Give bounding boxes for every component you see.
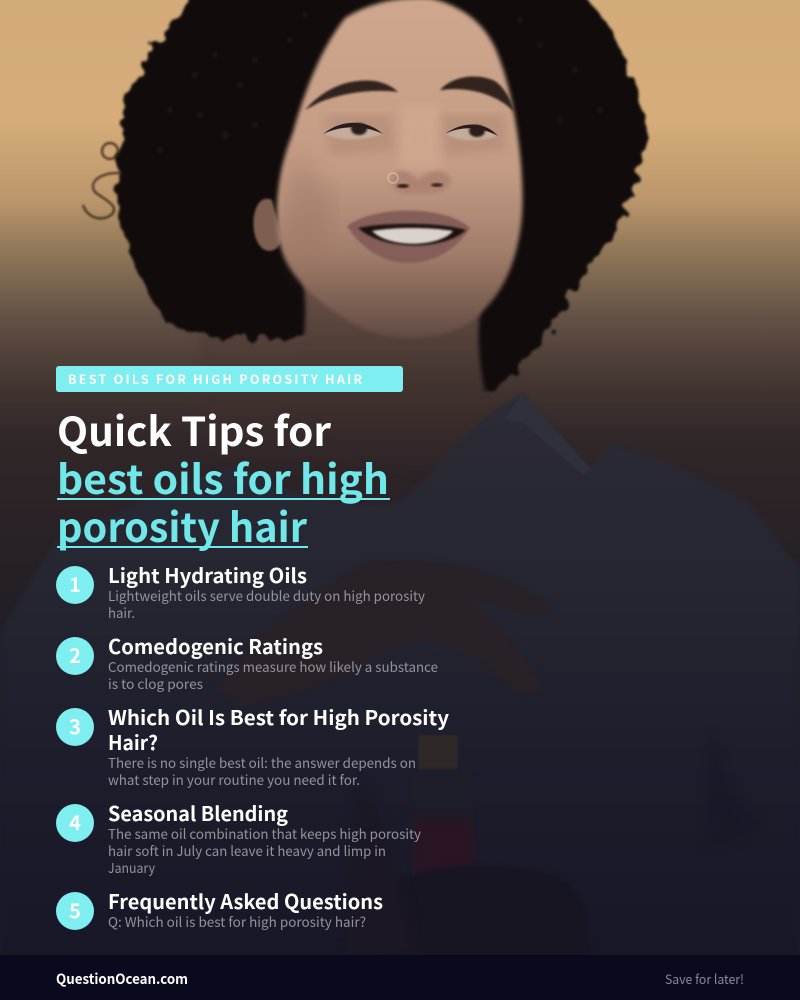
tip 3: what step in your routine you need it for. bbox=[108, 769, 360, 789]
neck bbox=[280, 280, 490, 480]
tip 1: Lightweight oils serve double duty on high porosity bbox=[108, 585, 425, 605]
face shading bbox=[287, 150, 335, 280]
title: porosity hair bbox=[57, 496, 308, 554]
eyes bbox=[323, 124, 383, 140]
tip 4 bbox=[56, 798, 421, 877]
tip 4: hair soft in July can leave it heavy and limp in bbox=[108, 840, 386, 860]
tip 4: 4 bbox=[69, 807, 81, 836]
tip 3 bbox=[56, 702, 450, 789]
title: Quick Tips for bbox=[57, 400, 332, 458]
category tag bbox=[56, 366, 403, 392]
forearm bbox=[385, 866, 590, 955]
tip 4: January bbox=[108, 857, 155, 877]
bottle bbox=[418, 735, 458, 770]
brows bbox=[305, 80, 398, 110]
shirt fold bbox=[705, 730, 762, 852]
tip 1 bbox=[56, 560, 425, 622]
face bbox=[277, 0, 523, 338]
tip 2: 2 bbox=[69, 640, 81, 669]
tip 4: The same oil combination that keeps high porosity bbox=[108, 823, 421, 843]
stray curls bbox=[83, 143, 122, 218]
tip 1: hair. bbox=[108, 602, 135, 622]
footer bar: Save for later! bbox=[665, 969, 744, 988]
tip 2: is to clog pores bbox=[108, 673, 203, 693]
mouth bbox=[347, 210, 470, 263]
tip 5: 5 bbox=[69, 895, 81, 924]
hand bbox=[215, 560, 550, 705]
tip 3: Hair? bbox=[108, 727, 158, 756]
footer bar bbox=[0, 955, 800, 1000]
tip 5: Frequently Asked Questions bbox=[108, 886, 383, 915]
hair bbox=[118, 0, 645, 392]
ear bbox=[253, 199, 282, 251]
title: best oils for high bbox=[57, 448, 389, 506]
title bbox=[57, 400, 390, 554]
tip 2 bbox=[56, 631, 438, 693]
tip 2: Comedogenic ratings measure how likely a substance bbox=[108, 656, 438, 676]
tip 5: Q: Which oil is best for high porosity hair? bbox=[108, 911, 366, 931]
tip 3: There is no single best oil: the answer depends on bbox=[108, 752, 416, 772]
tip 3: Which Oil Is Best for High Porosity bbox=[108, 702, 450, 731]
tip 4: Seasonal Blending bbox=[108, 798, 288, 827]
collar bbox=[503, 393, 592, 475]
tip 3: 3 bbox=[69, 711, 81, 740]
chest bbox=[200, 300, 500, 560]
tip 1: 1 bbox=[69, 569, 81, 598]
tip 5 bbox=[56, 886, 383, 931]
shirt bbox=[0, 393, 800, 1000]
tip 2: Comedogenic Ratings bbox=[108, 631, 323, 660]
tip 1: Light Hydrating Oils bbox=[108, 560, 307, 589]
hair texture bbox=[157, 12, 603, 153]
category tag: BEST OILS FOR HIGH POROSITY HAIR bbox=[68, 369, 362, 388]
footer bar: QuestionOcean.com bbox=[56, 969, 188, 989]
nose bbox=[391, 171, 450, 194]
